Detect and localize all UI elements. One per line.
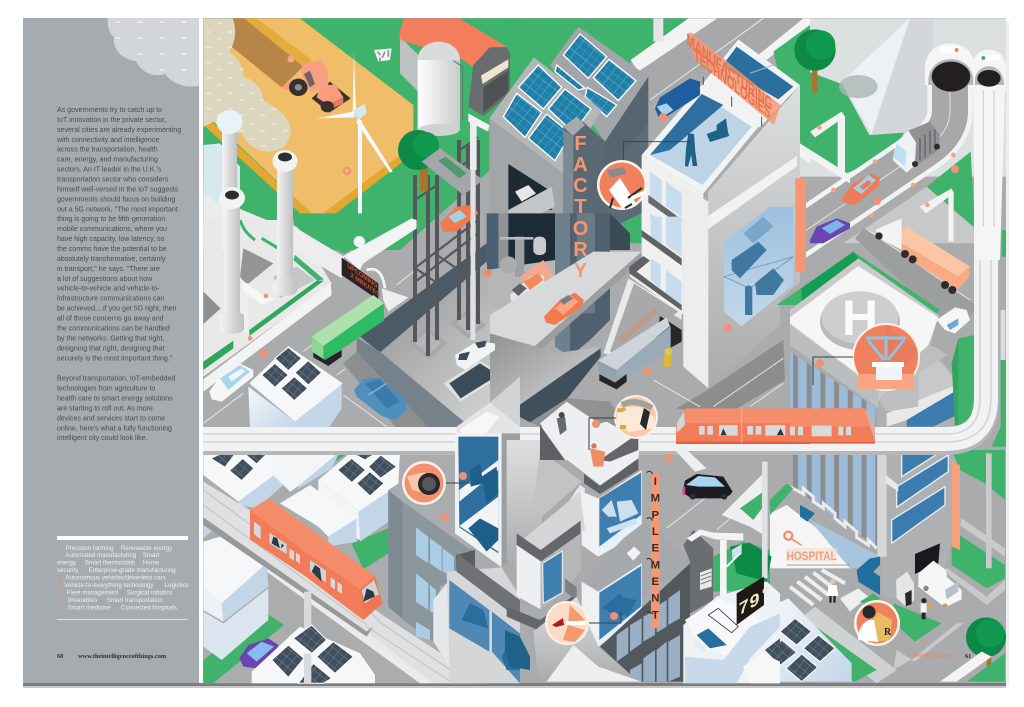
panel: left text page: [23, 18, 199, 683]
curb studs: [831, 153, 956, 218]
helipad letter: H: [842, 290, 878, 346]
sidewalks: [840, 588, 868, 612]
legend of numbered technologies: 7: [81, 567, 85, 574]
house D: [280, 485, 357, 547]
legend of numbered technologies: 8: [58, 574, 62, 582]
legend of numbered technologies: Enterprise-grade manufacturing: [87, 567, 176, 574]
vertical coral sign: [795, 178, 806, 272]
factory sign column: [563, 117, 607, 230]
grass triangle: [927, 152, 975, 228]
article text, paragraph one: vehicle-to-vehicle and vehicle-to-: [57, 286, 160, 293]
small solar building: [767, 598, 877, 682]
delivery locker: [896, 572, 914, 607]
factory lower floors: [487, 213, 630, 357]
rail lines: [983, 87, 994, 227]
train car two: [305, 538, 383, 620]
upper deck and orange car: [490, 252, 642, 453]
pole: [762, 462, 768, 578]
forklift on upper deck: [508, 185, 555, 230]
legend of numbered technologies: 2: [114, 545, 118, 552]
train car one: [250, 498, 323, 576]
roof plaza: [582, 522, 713, 613]
article text, paragraph one: have high capacity, low latency, so: [57, 236, 165, 243]
blue forecourt: [800, 505, 880, 595]
crosswalk: [790, 570, 845, 605]
icon: smoke cloud: [108, 18, 199, 86]
legend of numbered technologies: security: [57, 567, 79, 574]
page footer right: [914, 653, 971, 660]
hospital window stripes below rail: [793, 450, 877, 547]
small solar building: [248, 346, 343, 428]
hospital sign: [784, 532, 850, 565]
callout: smart wristband: [589, 395, 658, 450]
train cap over hospital: [790, 408, 875, 444]
rail support pole: [304, 592, 311, 683]
middle ledge block: [507, 492, 585, 632]
legend of numbered technologies: Fleet management: [65, 590, 119, 596]
shelf on right face: [705, 156, 797, 230]
legend of numbered technologies: Smart: [141, 552, 160, 559]
article text, paragraph one: securely is the most important thing.": [57, 355, 173, 362]
legend of numbered technologies: Home: [141, 560, 160, 566]
line to marker: [589, 418, 616, 450]
grass verge: [293, 213, 413, 254]
rail front over towers: [540, 402, 810, 467]
white ground under field: [203, 192, 295, 250]
lower shopfront: [533, 597, 638, 682]
article text, paragraph two: intelligent city could look like.: [57, 435, 148, 442]
white dump truck: [893, 122, 940, 173]
car on lower deck: [510, 273, 545, 305]
article text, paragraph one: with connectivity and intelligence: [56, 137, 159, 144]
orange car: [842, 173, 880, 205]
legend of numbered technologies: Renewable energy: [119, 545, 173, 552]
stack one: [216, 110, 242, 250]
legend of numbered technologies: 6: [135, 560, 139, 566]
figures on the roof: [685, 118, 729, 167]
highway sign: [342, 258, 408, 312]
robot car: [455, 341, 495, 370]
vehicles on the top road: [655, 29, 781, 127]
grey sign frame: [422, 148, 483, 195]
white pole by scaffold: [438, 113, 489, 340]
factory building: [489, 27, 648, 230]
car: [544, 293, 584, 325]
doctor: [827, 579, 838, 603]
room one: [582, 470, 642, 557]
factory rear wall: [563, 123, 648, 230]
tree shadow: [839, 75, 878, 98]
smokestacks: [216, 110, 298, 334]
article text, paragraph one: thing is going to be fifth-generation: [57, 216, 165, 223]
article text, paragraph one: mobile communications, where you: [57, 226, 167, 233]
legend of numbered technologies: 5: [78, 560, 82, 566]
legend of numbered technologies: Autonomous vehicles/driverless cars: [64, 574, 166, 582]
article text, paragraph one: several cities are already experimenting: [57, 127, 181, 134]
legend of numbered technologies: 11: [58, 590, 65, 596]
legend of numbered technologies: 12: [117, 590, 124, 596]
article text, paragraph two: are starting to roll out. As more: [57, 405, 153, 412]
legend of numbered technologies: 4: [136, 552, 140, 559]
rear roof with solar panels: [550, 27, 648, 142]
left industrial yard: [203, 213, 417, 427]
weather station: [687, 529, 743, 607]
hospital sign: HOSPITAL: [787, 549, 837, 563]
article text, paragraph one: himself well-versed in the IoT suggests: [57, 186, 179, 193]
apartment block: [388, 478, 475, 683]
street furniture lower centre: [647, 447, 780, 683]
rooftop near the monorail: [540, 402, 638, 462]
callout: smart pill: [545, 601, 621, 645]
road markings: [667, 490, 763, 530]
road traffic on the left: [209, 236, 495, 428]
worker in yellow: [664, 348, 672, 367]
robot in lower left room: [505, 630, 530, 670]
highway sign: 2 MINUTES: [351, 272, 380, 299]
legend of numbered technologies: Smart medicine: [66, 604, 111, 612]
legend of numbered technologies: Smart thermostats: [83, 560, 135, 566]
article text, paragraph one: transportation sector who considers: [57, 176, 169, 184]
silo: [418, 42, 463, 136]
article text, paragraph two: technologies from agriculture to: [57, 386, 155, 392]
delivery van: [918, 561, 962, 609]
article text, paragraph one: care, energy, and manufacturing: [57, 157, 158, 164]
article text, paragraph two: Beyond transportation, IoT-embedded: [57, 376, 175, 382]
green lots: [203, 613, 284, 683]
factory opening: [508, 164, 552, 210]
coral manufacturing sign: MANUFACTURING: [687, 29, 772, 115]
rooftop with figures: [542, 422, 640, 485]
article text, paragraph one: a lot of suggestions about how: [57, 276, 153, 283]
callout: smart thermostat: [402, 461, 472, 505]
icon: tree on the hillside: [794, 29, 836, 93]
factory front frame under the roof: [489, 118, 563, 230]
folio left: www.theintelligenceofthings.com: [78, 653, 167, 660]
ploughed furrow: [231, 18, 303, 87]
factory sign letters: FACTORY: [573, 133, 588, 282]
turbine base: [354, 236, 365, 247]
sidewalk below road: [843, 187, 977, 243]
article text, paragraph one: the comms have the potential to be: [57, 246, 167, 253]
machine: [500, 237, 553, 292]
panel: city illustration: [203, 18, 1006, 683]
icon: tractor: [282, 56, 351, 113]
room two: [582, 563, 642, 647]
article text, paragraph one: be achieved....If you get 5G right, then: [57, 306, 177, 313]
white pod building: [683, 582, 780, 683]
legend of numbered technologies: 9: [58, 582, 62, 589]
article text, paragraph one: out a 5G network. "The most important: [57, 206, 178, 213]
roof deck: [623, 85, 760, 193]
legend of numbered technologies: Logistics: [163, 582, 189, 589]
icon: cow: [374, 48, 392, 62]
highway sign: UPCOMING: [347, 262, 377, 290]
legend of numbered technologies: 14: [96, 597, 103, 604]
grass slope: [800, 68, 904, 173]
tree: [966, 617, 1006, 682]
vertical coral sign with text: IMPLEMENT: [651, 476, 660, 621]
legend of numbered technologies: Precision farming: [64, 545, 114, 552]
plaza corner: [675, 447, 707, 472]
white car: [209, 363, 253, 402]
legend of numbered technologies: 3: [58, 552, 62, 559]
factory platform: [343, 243, 520, 428]
legend bottom rule: [57, 619, 188, 620]
callout: package delivery: [854, 600, 900, 646]
icon: tree behind scaffold: [398, 130, 439, 191]
stack two: [219, 187, 245, 334]
smoke plume: [203, 18, 291, 203]
article text, paragraph one: the communications can be handled: [57, 326, 170, 332]
left small building stub: [203, 517, 215, 538]
farm field, barn and silo: [203, 18, 520, 250]
loading hatch: [443, 361, 503, 402]
front roof with solar panels: [489, 57, 602, 173]
article text, paragraph two: devices and services start to come: [57, 415, 165, 422]
upper tower: [457, 377, 520, 450]
article text, paragraph two: health care to smart energy solutions: [57, 396, 173, 402]
article text, paragraph one: by the networks. Getting that right,: [57, 335, 164, 342]
grass near plaza: [770, 483, 793, 515]
central cluster: [505, 422, 713, 682]
hospital: [790, 230, 1006, 600]
white curb: [203, 283, 332, 392]
article text, paragraph one: As governments try to catch up to: [57, 107, 162, 114]
legend of numbered technologies: Automated manufacturing: [64, 552, 137, 559]
tower right face: [708, 85, 800, 388]
legend of numbered technologies: 1: [58, 545, 62, 552]
article text, paragraph one: governments should focus on building: [57, 196, 175, 203]
car behind scaffold: [422, 148, 483, 232]
legend of numbered technologies: Smart transportation: [105, 597, 163, 604]
track flare at the tunnel: [973, 86, 1005, 260]
stacked house E: [203, 530, 268, 660]
article text, paragraph one: sectors. An IT leader in the U.K.'s: [57, 167, 162, 174]
staircase: [543, 485, 585, 545]
page footer right: theintelligence: [914, 653, 953, 659]
legend of numbered technologies: 13: [58, 597, 65, 604]
barn sign: [481, 59, 508, 84]
orange truck and lower road: [777, 218, 978, 327]
vertical coral wing sign: [952, 462, 960, 550]
legend of numbered technologies: 10: [155, 582, 162, 589]
block below: [600, 563, 690, 682]
legend of numbered technologies: Connected hospitals: [119, 604, 177, 612]
page footer right: 61: [965, 653, 971, 660]
left portal: [925, 43, 975, 92]
numbered markers: [259, 56, 959, 620]
callout: surgical robot: [813, 323, 920, 391]
article text, paragraph one: in transport," he says. "There are: [57, 266, 160, 273]
rooftop workers: [557, 412, 605, 467]
article text, paragraph one: absolutely transformative, certainly: [57, 256, 166, 263]
tower left wing: [642, 155, 703, 263]
grass and street right of hospital: [952, 450, 1005, 500]
elevated rail diagonal: [203, 482, 487, 683]
lower solar house: [252, 625, 375, 683]
scaffold towers: [412, 137, 483, 357]
white car by helipad: [937, 307, 970, 333]
article text, paragraph one: IoT innovation in the private sector,: [57, 117, 166, 124]
purple car: [239, 638, 278, 668]
black car: [683, 474, 733, 500]
central tower: [598, 39, 806, 417]
truck under triangular canopy: [598, 278, 682, 389]
top road behind factory: [510, 18, 810, 243]
callout: package delivery: R: [884, 627, 892, 638]
rear skylight: [702, 39, 800, 127]
house B: [271, 452, 340, 492]
road lane markings: [203, 272, 413, 427]
article text, paragraph one: designing that right, designing that: [57, 345, 164, 352]
article text, paragraph one: all of those concerns go away and: [57, 316, 164, 322]
road from tunnel: [760, 77, 950, 262]
mountain and tunnels: [760, 18, 1006, 262]
rack: [565, 578, 577, 600]
article text, paragraph two: online, here's what a fully functioning: [57, 425, 172, 432]
tunnel portals: [925, 43, 1006, 227]
floor below deck: [490, 333, 600, 417]
temperature display: 79°: [738, 582, 771, 622]
article text, paragraph one: infrastructure communications can: [57, 296, 164, 303]
legend of numbered technologies: Wearables: [66, 597, 97, 604]
road vehicles and hospital forecourt: [777, 112, 978, 333]
right portal: [972, 50, 1006, 90]
tower corner column: [683, 187, 708, 388]
white plaza: [770, 505, 858, 568]
blue car: [354, 377, 407, 420]
purple car: [810, 218, 850, 243]
solar house C: [318, 452, 400, 542]
legend top rule: [57, 536, 188, 540]
courier: [921, 598, 931, 619]
lamp post: [240, 280, 275, 341]
elevated monorail track: [203, 60, 991, 444]
folio left: 60: [57, 653, 63, 660]
stack three: [272, 150, 298, 296]
green truck: [312, 295, 384, 366]
lower left district: [203, 450, 487, 683]
hospital lower right wing: [790, 450, 952, 600]
legend of numbered technologies: Surgical robotics: [125, 590, 172, 596]
hospital window stripes above rail: [790, 352, 877, 450]
solar house A: [203, 452, 283, 508]
blue car on rear road: [655, 78, 700, 117]
central lower towers: [447, 377, 713, 683]
barn: [399, 18, 513, 116]
legend of numbered technologies: Vehicle-to-everything technology: [64, 582, 154, 589]
lower office rooms: [447, 567, 520, 683]
street lamps: [800, 112, 954, 242]
wind turbine: [317, 52, 393, 237]
article text, paragraph one: across the transportation, health: [57, 147, 158, 154]
monorail train: [676, 408, 810, 444]
wall ground shadow: [343, 352, 430, 428]
ground base: [203, 18, 1006, 683]
vertical coral sign with text: [647, 471, 660, 628]
coral manufacturing sign: TECHNOLOGIES: [694, 44, 770, 123]
green yard: [713, 542, 770, 592]
road marking: [267, 563, 433, 683]
legend of numbered technologies: energy: [57, 560, 77, 566]
road around tower base: [653, 340, 785, 417]
glass room: [724, 207, 793, 326]
legend of numbered technologies: 16: [111, 604, 118, 612]
legend of numbered technologies: 15: [58, 604, 65, 612]
helipad roof: [790, 258, 947, 412]
hospital right wing: [878, 230, 1006, 470]
callout: VR technician: [597, 160, 647, 210]
lower right streets and plaza: [767, 450, 1006, 683]
green lawn: [893, 603, 942, 642]
coral manufacturing sign: [687, 29, 781, 127]
